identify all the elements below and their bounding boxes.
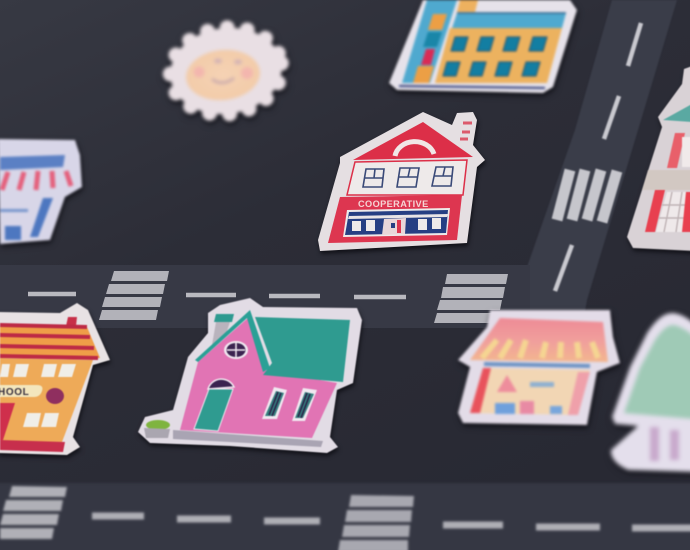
sign: COOPERATIVE (358, 199, 429, 209)
shop pillar (30, 198, 53, 237)
road: horizontal middle (0, 265, 530, 328)
road markings: bottom dashes (92, 516, 690, 528)
awning (470, 318, 608, 362)
roof (353, 122, 473, 160)
walkway (173, 430, 323, 447)
awning stripes (2, 171, 71, 190)
road markings: vertical lane dashes (555, 23, 641, 291)
sticker: pink house (138, 298, 362, 453)
tree trunk (650, 427, 679, 461)
crosswalk: bottom centre (338, 495, 414, 550)
sticker: green tree (611, 313, 690, 472)
walls (180, 318, 337, 438)
upper wall (347, 160, 467, 195)
road: horizontal bottom (0, 483, 690, 550)
shop window (0, 209, 28, 240)
lower window grid (656, 192, 690, 232)
side tiles (413, 14, 447, 83)
door (194, 379, 234, 431)
crosswalk: middle right (434, 274, 508, 323)
school wall (0, 358, 93, 442)
shop goods (495, 382, 562, 414)
sticker: pink awning shop (458, 310, 620, 425)
lower wall (328, 195, 462, 243)
upper windows (363, 167, 453, 187)
sticker: orange school (0, 303, 110, 455)
chimney (214, 314, 234, 322)
sticker: right red and white house (627, 65, 690, 251)
sun face (184, 46, 262, 104)
chimney stripes (460, 123, 472, 139)
round attic window (224, 341, 248, 359)
shop wall (470, 368, 590, 415)
side windows (262, 387, 317, 421)
shopfront (343, 208, 450, 237)
crosswalk: middle left (99, 271, 169, 320)
roof arc (395, 142, 434, 156)
school door (0, 403, 15, 440)
crosswalk: vertical road (557, 170, 617, 222)
round emblem (46, 388, 64, 404)
crosswalk: bottom left (0, 486, 67, 539)
road markings: middle dashes (28, 294, 406, 297)
planter (144, 420, 170, 438)
sticker: left blue shop (0, 139, 82, 244)
school sign (0, 385, 42, 398)
sticker: red cooperative building (318, 112, 485, 251)
school base (0, 440, 65, 452)
sticker: blue and orange apartment building (389, 0, 577, 93)
windows (443, 37, 547, 76)
school windows (0, 364, 76, 427)
road: vertical (522, 0, 677, 328)
school roof (0, 317, 100, 358)
sticker: sun (165, 21, 287, 121)
roof (255, 317, 350, 382)
